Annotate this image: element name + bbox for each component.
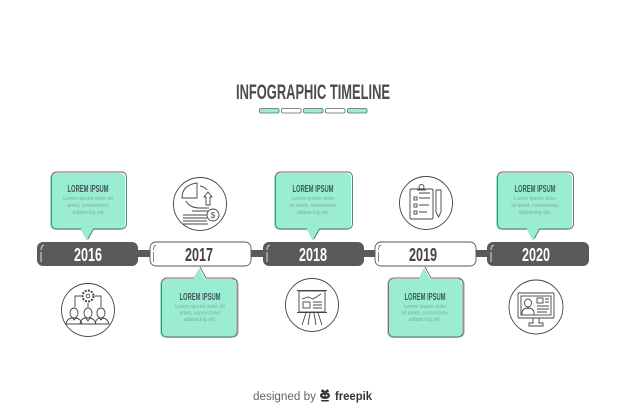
callout 2018 body: Lorem ipsum dolor — [292, 196, 335, 202]
icon: clipboard and pencil — [400, 176, 452, 230]
callout 2017 body: Lorem ipsum dolor sit — [175, 304, 225, 310]
year bar 2020 — [487, 242, 589, 266]
callout 2016 — [50, 172, 126, 241]
year bar 2020: 2020 — [522, 245, 550, 265]
callout 2018 body: sit amet, consectetur — [289, 203, 337, 209]
icon: freepik logo — [320, 389, 330, 402]
callout 2020 — [496, 172, 574, 241]
timeline connectors — [137, 250, 488, 257]
icon: pie chart and coins — [174, 178, 226, 230]
icon: team with gear — [62, 284, 114, 336]
callout 2017 — [160, 267, 238, 338]
freepik credit — [253, 389, 373, 403]
callout 2016 body: amet, consectetur — [67, 203, 109, 209]
callout 2019 body: sit amet, consectetur — [401, 310, 449, 316]
callout 2020 heading: LOREM IPSUM — [514, 184, 556, 195]
icon: monitor with profile — [509, 280, 563, 334]
callout 2016 body: Lorem ipsum dolor sit — [63, 196, 113, 202]
callout 2017 body: amet, consectetur — [179, 310, 221, 316]
freepik credit: freepik — [335, 391, 373, 403]
callout 2016 body: adipiscing elit — [72, 210, 104, 216]
callout 2016 heading: LOREM IPSUM — [68, 184, 108, 195]
year bar 2017: 2017 — [185, 245, 213, 265]
title: INFOGRAPHIC TIMELINE — [236, 80, 390, 104]
callout 2020 body: sit amet, consectetur — [511, 203, 559, 209]
year bar 2018 — [263, 242, 364, 266]
year bar 2019 — [375, 242, 476, 266]
callout 2020 body: adipiscing elit. — [519, 210, 551, 216]
year bar 2016: 2016 — [74, 245, 102, 265]
title pill row — [260, 108, 367, 113]
callout 2019 — [387, 267, 464, 338]
callout 2019 body: Lorem ipsum dolor — [404, 304, 447, 310]
callout 2018 — [274, 172, 352, 241]
callout 2019 heading: LOREM IPSUM — [404, 292, 446, 303]
icon: pie chart and coins: $ — [211, 211, 216, 220]
callout 2019 body: adipiscing elit. — [409, 317, 441, 323]
callout 2018 heading: LOREM IPSUM — [292, 184, 334, 195]
callout 2017 heading: LOREM IPSUM — [180, 292, 220, 303]
year bar 2018: 2018 — [299, 245, 327, 265]
freepik credit: designed by — [253, 391, 316, 403]
year bar 2019: 2019 — [409, 245, 437, 265]
icon: presentation board — [286, 278, 338, 332]
callout 2020 body: Lorem ipsum dolor — [514, 196, 557, 202]
callout 2018 body: adipiscing elit. — [297, 210, 329, 216]
year bar 2017 — [150, 242, 251, 266]
year bar 2016 — [37, 242, 138, 266]
callout 2017 body: adipiscing elit. — [184, 317, 216, 323]
